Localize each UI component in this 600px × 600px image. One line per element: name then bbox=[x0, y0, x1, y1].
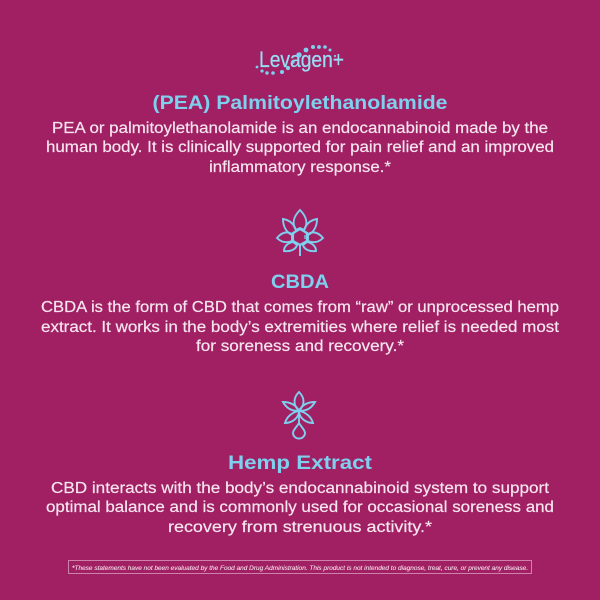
text block: CBDA description: extract. It works in the body’s extremities where relief is needed most bbox=[41, 319, 560, 336]
heading: CBDA: CBDA bbox=[271, 271, 329, 293]
text block: PEA description: PEA or palmitoylethanolamide is an endocannabinoid made by the bbox=[52, 120, 548, 137]
heading: Hemp Extract: Hemp Extract bbox=[228, 452, 373, 474]
text block: Hemp Extract description bbox=[46, 480, 554, 536]
text block: Hemp Extract description: CBD interacts with the body’s endocannabinoid system to support bbox=[51, 480, 550, 497]
disclaimer box: *These statements have not been evaluated by the Food and Drug Administration. This product is not intended to diagnose, treat, cure, or prevent any disease. bbox=[72, 565, 528, 572]
text block: CBDA description: for soreness and recovery.* bbox=[196, 338, 404, 355]
text block: PEA description: human body. It is clinically supported for pain relief and an improved bbox=[46, 139, 554, 156]
icon: hemp leaf with drop bbox=[283, 392, 315, 438]
text block: PEA description bbox=[46, 120, 554, 176]
logo: Levagen+: Levagen+ bbox=[259, 47, 344, 72]
text block: PEA description: inflammatory response.* bbox=[209, 159, 391, 176]
heading: PEA: (PEA) Palmitoylethanolamide bbox=[152, 92, 448, 114]
text block: CBDA description: CBDA is the form of CBD that comes from “raw” or unprocessed hemp bbox=[41, 299, 559, 316]
text block: Hemp Extract description: recovery from strenuous activity.* bbox=[168, 519, 432, 536]
text block: Hemp Extract description: optimal balance and is commonly used for occasional soreness and bbox=[46, 499, 554, 516]
disclaimer box bbox=[68, 560, 532, 574]
icon: cannabis leaf with molecule bbox=[277, 210, 323, 256]
text block: CBDA description bbox=[41, 299, 560, 355]
